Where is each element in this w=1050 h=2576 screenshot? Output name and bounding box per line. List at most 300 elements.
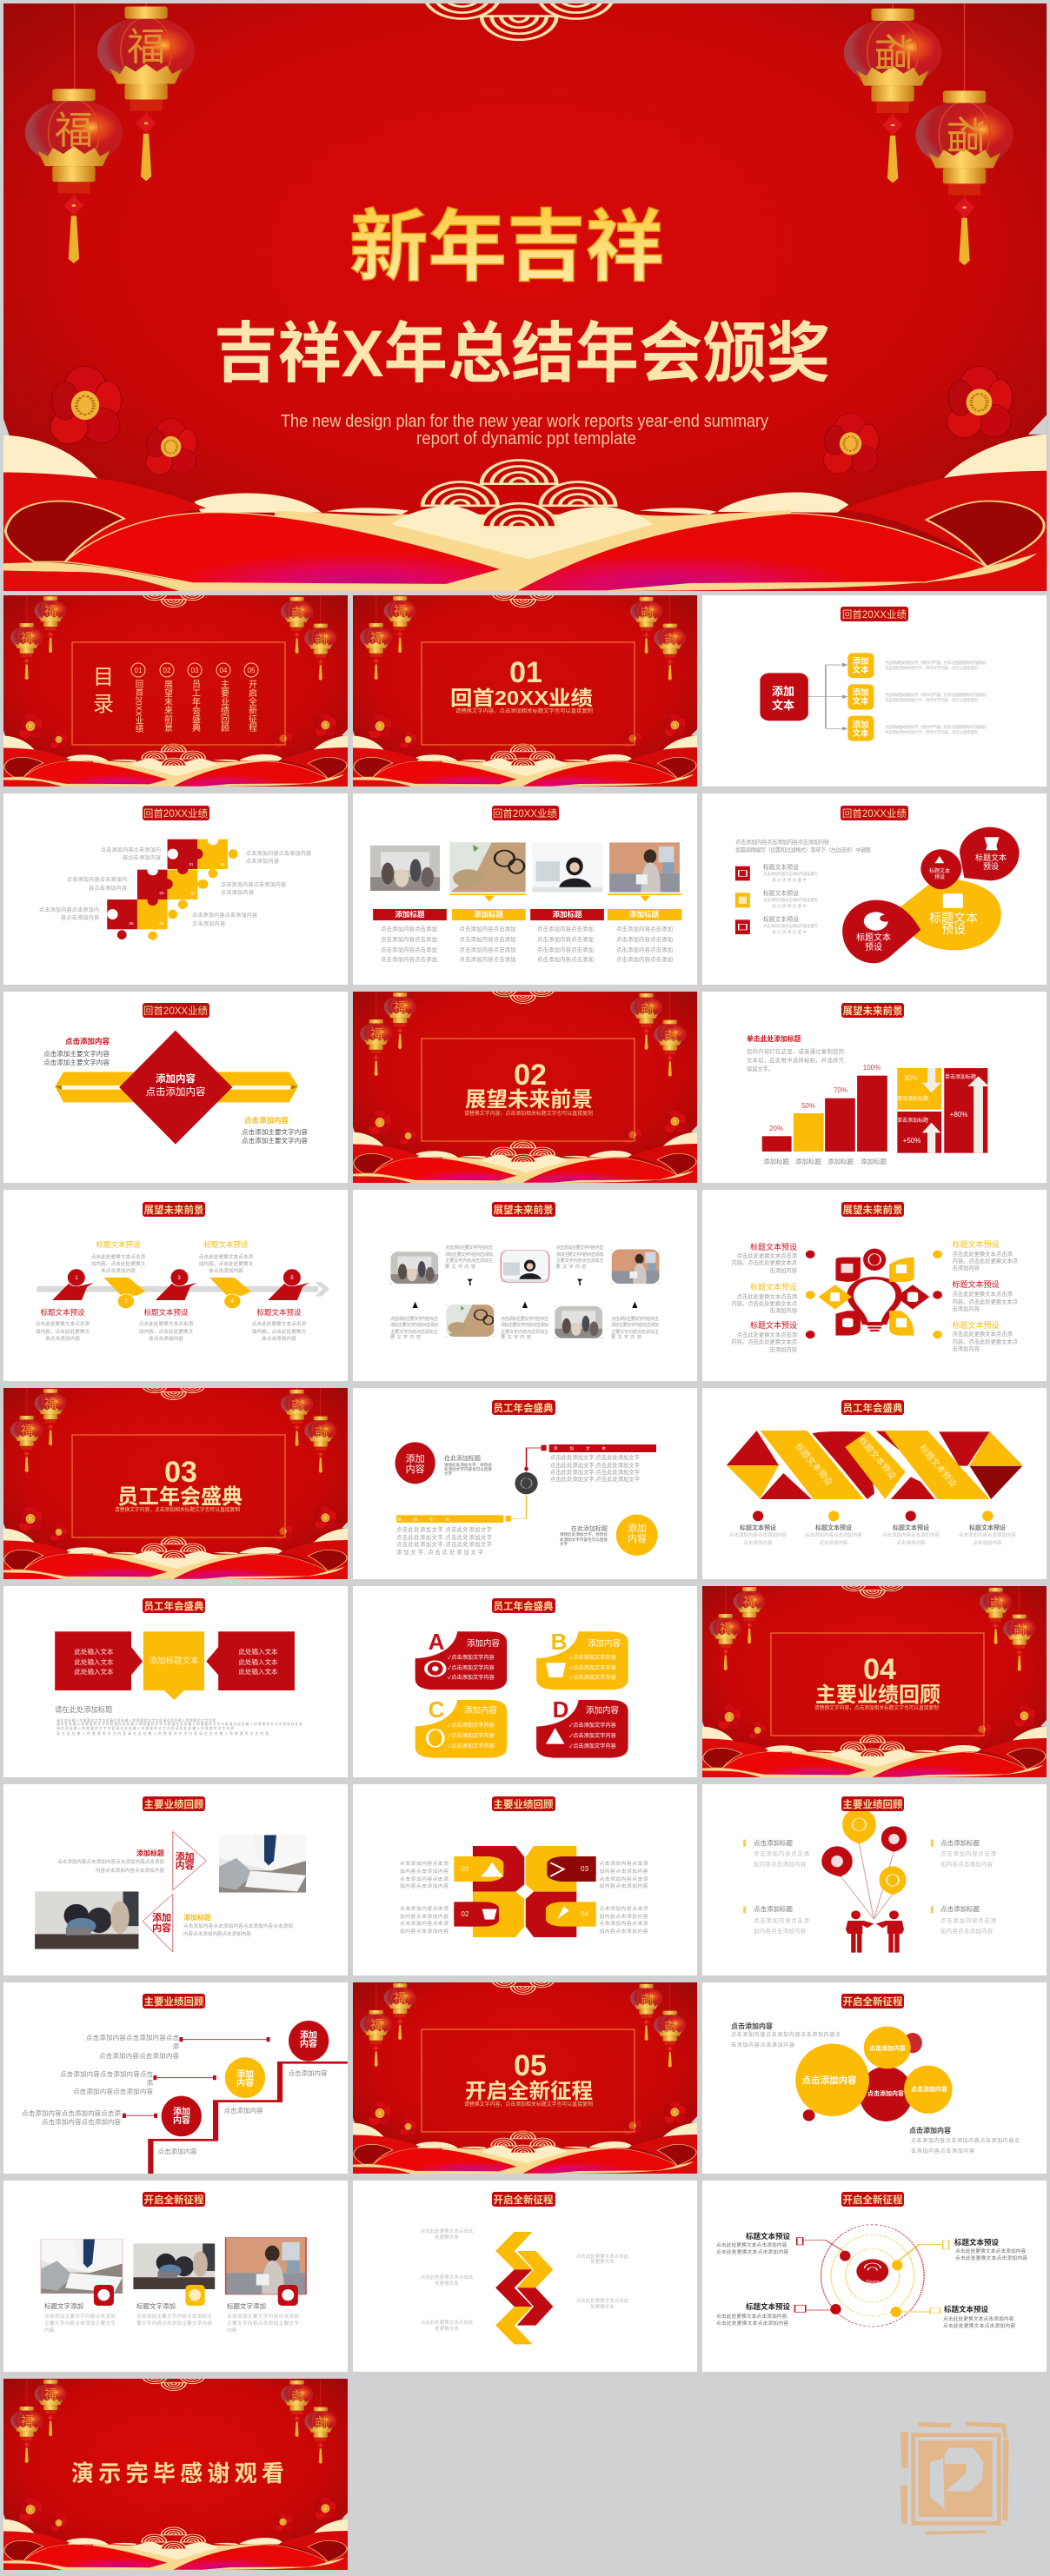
descriptions: 点击添加相关标题文字，修改文字内容，也可以直接复制 (885, 697, 978, 703)
panel: puzzle slide (3, 793, 348, 985)
bar labels: 添加文本 (397, 1517, 450, 1523)
descriptions (885, 660, 987, 735)
process labels (406, 1452, 647, 1544)
step captions: 加内容。点击此处更换文 (91, 1260, 146, 1267)
teardrop labels: 标题文本 (856, 932, 891, 943)
card lists: ✓点击添加文字内容 (569, 1722, 616, 1729)
panel: light bulb slide: 击添加内容 (770, 1306, 798, 1314)
bubble labels: 点击添加内容 (867, 2089, 904, 2097)
captions: 点击添加内容点击添加内容点击添加内容点击添加 (183, 1922, 293, 1929)
panel: light bulb slide: 击添加内容 (953, 1305, 980, 1312)
orbit titles: 标题文本预设 (944, 2305, 989, 2314)
left captions: 加内容点击添加内容 (400, 1928, 449, 1935)
lantern characters (55, 26, 986, 154)
lantern labels: 福 (394, 1000, 406, 1015)
puzzle captions: 点击添加内容 (221, 889, 254, 896)
zigzag captions: 处更换文本 (435, 2280, 459, 2287)
callout right: 点击添加主要文字内容 (242, 1136, 308, 1145)
panel: balloons slide (702, 1784, 1047, 1975)
lantern labels: 福 (662, 2020, 677, 2032)
panel: ABCD cards slide (353, 1586, 697, 1777)
left captions: 点击添加内容点击添 (400, 1860, 449, 1867)
intro text: 如需调用编写（设置和过滤格式）菜单下（左边选项）中调整 (735, 846, 872, 853)
orbit captions: 点击此处更换文本点击添加内容 (955, 2254, 1027, 2261)
body text: 点击此处添加文字,点击此处添加文字 (550, 1453, 640, 1461)
block labels (75, 1647, 278, 1676)
panel: light bulb slide: 点击此处更换文本点击添 (737, 1251, 798, 1259)
panel: teardrop slide: 点击添加内容点击添加内容设置可 (763, 897, 818, 903)
panel: contents slide: 01 (135, 667, 143, 674)
callout left: 点击添加内容 (65, 1037, 110, 1046)
body text (396, 1453, 640, 1556)
captions: 添加标题 (136, 1849, 164, 1857)
balloon captions: 点击添加标题 (940, 1838, 980, 1847)
teardrop labels: 标题文本 (975, 853, 1007, 862)
body text: 添加文字,点击此处添加文字 (396, 1548, 483, 1556)
frame (771, 1633, 984, 1736)
panel: section 01 slide (353, 593, 697, 787)
photo captions: 要文字内容 (445, 1263, 476, 1270)
card lists: ✓点击添加文字内容 (448, 1722, 495, 1729)
photo captions (390, 1244, 660, 1340)
balloon captions (754, 1838, 980, 1913)
panel: contents slide: 主要业绩回顾 (219, 680, 229, 733)
callout right: 点击添加内容 (244, 1116, 289, 1125)
column captions: 点击添加内容点击添加 (381, 925, 437, 933)
bubble captions: 击添加内容点击添加内容 (911, 2148, 974, 2154)
block labels: 此处输入文本 (75, 1647, 114, 1656)
heading pill (492, 2192, 555, 2207)
step numbers: 3 (177, 1276, 181, 1281)
heading pill: 开启全新征程 (843, 1995, 903, 2008)
left captions: 加内容点击添加内容 (400, 1913, 449, 1920)
tab numbers: 02 (462, 1910, 469, 1918)
photo captions: 点击添加主要文字内容点击 (556, 1244, 603, 1251)
puzzle captions: 点击添加内容点击添加内容 (246, 850, 311, 857)
captions: 内容点击添加内容点击添加内容 (183, 1930, 251, 1937)
card lists: ✓点击添加文字内容 (448, 1654, 495, 1661)
panel: teardrop slide: 点击添加内容点击添加内容设置可 (763, 923, 818, 929)
heading pill (492, 1202, 555, 1217)
stair captions: 点击添加内容 (224, 2106, 263, 2115)
heading pill (143, 2192, 205, 2207)
closing title: 演示完毕感谢观看 (71, 2460, 284, 2486)
column captions (381, 925, 673, 963)
process captions (444, 1454, 608, 1547)
heading pill: 员工年会盛典 (494, 1402, 554, 1414)
zigzag captions: 点击此处更换文本点击此 (576, 2297, 629, 2304)
process captions: 请替此处添加文字，修改此 (444, 1462, 492, 1468)
panel: light bulb slide (702, 1190, 1047, 1381)
ribbon captions: 标题文本预设 (740, 1524, 776, 1531)
panel: light bulb slide: 点击此处更换文本点击添 (953, 1250, 1013, 1258)
note text: 请在此处输入你需要的文字内容请在此处输入你需要的文字内容请在此处输入你需要的文字内容请在此处输入你需要的文字内容请在此处 (56, 1722, 302, 1726)
block labels: 此处输入文本 (238, 1647, 278, 1656)
stair captions (158, 2068, 328, 2155)
column captions: 点击添加内容点击添加 (381, 955, 437, 963)
photo captions: 主要文字内容点击添加主 (390, 1328, 439, 1335)
zigzag captions: 点击此处更换文本点击此 (421, 2274, 474, 2281)
left captions: 标题文本预设 (750, 1242, 797, 1251)
panel: balloons slide: 点击添加内容点击添 (754, 1849, 810, 1857)
right captions: 标题文本预设 (953, 1279, 1000, 1289)
cards (415, 1631, 628, 1758)
step numbers: 5 (290, 1276, 294, 1281)
section note: 请替换文字内容，点击添加相关标题文字也可以直接复制 (814, 1704, 939, 1711)
card titles: 标题文字添加 (227, 2301, 266, 2310)
diamond graphic (55, 1031, 298, 1145)
orbit captions: 点击此处更换文本点击添加内容, (716, 2241, 788, 2248)
panel: balloons slide: 加内容点击添加内容 (940, 1927, 994, 1935)
right captions: 加内容点击添加内容 (600, 1928, 648, 1935)
panel: diamond slide (3, 992, 348, 1183)
frame (72, 1435, 285, 1537)
captions: 内容点击添加内容点击添加内容 (96, 1867, 164, 1874)
growth labels: 单击添加标题 (945, 1073, 976, 1080)
panel: process circles slide (353, 1388, 697, 1579)
card letters: C (429, 1696, 445, 1723)
heading pill: 回首20XX业绩 (842, 807, 907, 820)
lantern labels: 福 (289, 606, 304, 618)
frame (422, 1039, 635, 1141)
panel: balloons slide: 加内容点击添加内容 (940, 1860, 994, 1868)
chart intro (747, 1034, 844, 1072)
step captions: 点击此处更换文本点击添 (91, 1253, 146, 1260)
right captions: 标题文本预设 (953, 1320, 1000, 1330)
body text: 点击此处添加文字,点击此处添加文字 (550, 1468, 640, 1476)
photo captions: 主要文字内容点击添加主 (445, 1257, 494, 1264)
panel: contents slide: 回首20XX业绩 (134, 680, 143, 734)
tab numbers: 01 (462, 1865, 469, 1873)
section title: 主要业绩回顾 (815, 1683, 940, 1707)
column captions: 点击添加内容点击添加 (616, 955, 673, 963)
contents list (131, 663, 258, 677)
puzzle numbers: 04 (190, 891, 196, 895)
tree labels: 文本 (772, 699, 794, 712)
card letters: B (551, 1629, 567, 1655)
panel: light bulb slide: 内容。点击此处更换文本点 (731, 1299, 797, 1307)
heading pill (143, 806, 209, 820)
heading pill (143, 1202, 205, 1217)
card titles: 添加内容 (467, 1638, 501, 1649)
panel: teardrop slide: 通过调用设置中 (772, 929, 807, 935)
note text (55, 1705, 302, 1736)
ribbon captions: 标题文本预设 (893, 1524, 929, 1531)
descriptions: 点击添加相关标题文字，修改文字内容，也可以直接复制 (885, 665, 978, 671)
tree labels: 添加 (852, 687, 869, 698)
note text: 请在此处输入你需要的文字内容请在此处输入你需要的文字内容请在此处输入你需要的文字内容 (56, 1726, 234, 1730)
step captions: 点击此处更换文本点击添 (36, 1320, 90, 1327)
panel: rounded photos slide (353, 1190, 697, 1381)
chevron labels: 内容 (176, 1859, 195, 1871)
growth labels (897, 1073, 976, 1145)
descriptions: 点击添加相关标题文字，修改文字内容，也可以直接复制你的内容到此 (885, 692, 987, 698)
panel: zigzag slide (353, 2181, 697, 2372)
lantern labels: 福 (21, 631, 33, 646)
timeline graphic (37, 1269, 329, 1309)
step titles (40, 1240, 302, 1317)
puzzle captions: 点击添加内容点击添加内 (101, 846, 161, 853)
captions (57, 1849, 293, 1937)
source label: Source (866, 2280, 880, 2285)
descriptions: 点击添加相关标题文字，修改文字内容，也可以直接复制 (885, 729, 978, 735)
growth labels: 单击添加标题 (897, 1095, 928, 1102)
stair captions: 点击添加内容 (158, 2147, 197, 2155)
card lists: ✓点击添加文字内容 (569, 1732, 616, 1739)
photo captions: 要文字内容 (501, 1333, 532, 1340)
orbit titles: 标题文本预设 (746, 2232, 790, 2241)
heading pill: 展望未来前景 (843, 1005, 902, 1017)
panel: ribbon slide: 点击添加内容点击添加内容 (882, 1531, 940, 1538)
left captions: 点击添加内容点击添 (400, 1905, 449, 1912)
section note: 请替换文字内容，点击添加相关标题文字也可以直接复制 (115, 1506, 240, 1513)
stair captions: 点击添加内容 (289, 2068, 328, 2077)
panel: stairs slide: 点击添加内容点击添加内容 (42, 2117, 122, 2126)
panel: contents slide: 开启全新征程 (247, 680, 257, 732)
panel: two photos chevron slide (3, 1784, 348, 1975)
panel: contents slide: 员工年会盛典 (189, 680, 200, 733)
blocks (55, 1631, 295, 1700)
chart intro: 保留文字。 (747, 1065, 774, 1072)
column captions: 点击添加内容点击添加 (537, 925, 594, 933)
bar categories: 添加标题 (763, 1157, 789, 1165)
left captions: 加内容点击添加内容 (400, 1882, 449, 1889)
tab numbers (462, 1865, 589, 1918)
panel: teardrop slide (702, 793, 1047, 985)
card captions (44, 2313, 299, 2334)
icon: watermark stamp (900, 2421, 1009, 2535)
heading pill (492, 1400, 555, 1415)
list text: 标题文本预设 (763, 915, 799, 923)
zigzag captions: 点击此处更换文本点击此 (576, 2253, 629, 2260)
bar categories: 添加标题 (861, 1157, 887, 1165)
chevron labels: 内容 (152, 1922, 171, 1934)
ribbon captions (740, 1524, 1006, 1531)
heading pill: 员工年会盛典 (494, 1600, 554, 1612)
panel: balloons slide: 点击添加内容点击添 (940, 1849, 997, 1857)
orbit captions: 点击此处更换文本点击添加内容 (716, 2248, 788, 2255)
note text: 请在此处输入你需要的文字内容请在此处输入你需要的文字内容请在此处输入你需要的文字内容 (56, 1718, 216, 1723)
bar labels: 添加标题 (395, 910, 425, 919)
section number: 05 (514, 2049, 547, 2082)
bar labels: 添加标题 (629, 910, 659, 919)
teardrop labels (856, 853, 1007, 953)
panel: contents slide: 03 (191, 667, 199, 674)
panel: tree diagram slide (702, 595, 1047, 787)
photo captions: 点击添加主要文字内容点击 (390, 1315, 438, 1322)
contents heading: 目 (93, 666, 114, 689)
step titles: 标题文本预设 (256, 1308, 302, 1317)
step captions: 加内容。点击此处更换文 (36, 1328, 90, 1335)
step captions: 加内容。点击此处更换文 (252, 1328, 307, 1335)
panel: light bulb slide: 击添加内容 (770, 1266, 798, 1274)
orbit captions: 点击此处更换文本点击添加内容 (943, 2322, 1015, 2329)
bar values: 100% (863, 1064, 881, 1072)
process captions: 在此添加标题 (571, 1524, 608, 1532)
panel: section 03 slide (3, 1385, 348, 1579)
heading pill: 员工年会盛典 (144, 1600, 204, 1612)
panel: balloons slide: 点击添加内容点击添 (754, 1916, 810, 1924)
photo captions: 要文字内容 (611, 1333, 642, 1340)
puzzle captions: 点击添加内容点击添加内 (39, 906, 99, 913)
lantern labels: 福 (44, 604, 56, 619)
step numbers: 1 (75, 1276, 78, 1281)
panel: ribbon slide: 点击添加内容点击添加内容 (805, 1531, 862, 1538)
column captions: 点击添加内容点击添加 (537, 946, 594, 953)
card titles: 添加内容 (586, 1705, 620, 1716)
bar chart (762, 1068, 989, 1153)
panel: light bulb slide: 内容。点击此处更换文本点 (953, 1338, 1018, 1345)
balloon captions: 点击添加标题 (754, 1838, 793, 1847)
left captions (400, 1860, 449, 1935)
stair circle labels: 内容 (236, 2077, 254, 2088)
zigzag captions: 处更换文本 (590, 2258, 615, 2265)
right captions: 点击添加内容点击添 (600, 1905, 648, 1912)
panel: ribbon slide: 点击添加内容 (743, 1539, 773, 1546)
photos with badges (41, 2238, 306, 2306)
english tagline (281, 412, 768, 448)
card captions: 内容 (227, 2327, 237, 2334)
column captions: 点击添加内容点击添加 (381, 946, 437, 953)
heading pill (841, 1994, 904, 2008)
heading pill: 回首20XX业绩 (842, 608, 907, 621)
puzzle numbers: 06 (159, 921, 164, 926)
step captions: 本点击添加内容 (45, 1335, 80, 1342)
right captions (953, 1239, 1000, 1330)
heading pill (143, 1598, 205, 1613)
panel: balloons slide: 点击添加内容点击添 (940, 1916, 997, 1924)
section number: 02 (514, 1059, 547, 1092)
section title: 开启全新征程 (465, 2080, 593, 2103)
frame (72, 642, 285, 745)
panel: section 05 slide (353, 1980, 697, 2174)
card titles: 添加内容 (464, 1705, 498, 1716)
orbit captions (716, 2241, 1027, 2329)
lantern labels: 福 (662, 633, 677, 645)
step numbers (75, 1276, 294, 1305)
section title: 回首20XX业绩 (450, 687, 593, 709)
bar categories: 添加标题 (827, 1157, 854, 1165)
photos and bars (370, 842, 681, 920)
card letters: A (429, 1629, 445, 1655)
ribbon labels (793, 1435, 960, 1490)
process captions: 处添加文字内容也可以直接 (444, 1466, 492, 1472)
section note: 请替换文字内容，点击添加相关标题文字也可以直接复制 (455, 707, 593, 714)
block labels: 此处输入文本 (238, 1667, 278, 1676)
intro text: 点击添加内容点击添加内容点击添加内容 (735, 838, 830, 846)
panel: ribbon slide: 点击添加内容 (896, 1539, 926, 1546)
card lists (448, 1654, 616, 1749)
body text: 点击此处添加文字,点击此处添加文字 (396, 1540, 492, 1548)
photo captions: 添加主要文字内容点击添加 (501, 1321, 548, 1328)
step numbers: 4 (230, 1299, 234, 1305)
contents heading (93, 666, 114, 716)
puzzle numbers: 03 (159, 891, 164, 895)
column captions: 点击添加内容点击添加 (381, 935, 437, 943)
lantern labels: 福 (289, 2389, 304, 2401)
balloon captions: 点击添加标题 (940, 1904, 980, 1913)
note text: 请在此处输入你需要的文字内容请在此处输入你需要的文字内容请在此处输入你需要的文字内容 (56, 1731, 269, 1736)
stairs graphic (123, 2021, 348, 2174)
card captions: 要文字内容点击添加主要文字内容 (136, 2320, 212, 2327)
card titles: 添加内容 (588, 1638, 621, 1649)
lantern labels: 福 (662, 1029, 677, 1041)
panel: ribbon slide (702, 1388, 1047, 1579)
teardrop labels: 预设 (941, 922, 966, 936)
column captions: 点击添加内容点击添加 (459, 925, 516, 933)
ribbon labels: 标题文本预设 (856, 1435, 899, 1482)
panel: light bulb slide: 击添加内容 (953, 1344, 980, 1352)
heading pill: 主要业绩回顾 (843, 1798, 903, 1810)
card lists: ✓点击添加文字内容 (448, 1743, 495, 1749)
orbit titles (746, 2232, 1000, 2314)
photo captions: 点击添加主要文字内容点击 (611, 1315, 659, 1322)
tree labels: 添加 (772, 685, 794, 698)
orbit captions: 点击此处更换文本点击添加内容, (716, 2313, 788, 2320)
left captions: 加内容点击添加内容 (400, 1868, 449, 1875)
callout left: 点击添加主要文字内容 (43, 1058, 110, 1066)
growth labels: 30% (904, 1074, 918, 1082)
tab numbers: 03 (581, 1865, 589, 1873)
ribbon labels: 标题文本预设 (793, 1441, 835, 1488)
panel: stairs slide (3, 1982, 348, 2174)
panel: light bulb slide: 击添加内容 (953, 1264, 980, 1271)
panel: contents slide: 展望未来前景 (162, 680, 172, 732)
zigzag captions: 点击此处更换文本点击此 (421, 2227, 474, 2234)
bar labels (395, 910, 659, 919)
panel: three blocks slide (3, 1586, 348, 1777)
step captions: 本点击添加内容 (262, 1335, 296, 1342)
card captions: 点击添加主要文字内容点击添加主 (136, 2313, 212, 2320)
step captions: 加内容。点击此处更换文 (199, 1260, 254, 1267)
card captions: 点击添加主要文字内容点击添加 (44, 2313, 116, 2320)
lantern labels (21, 2387, 328, 2429)
orbit captions: 点击此处更换文本点击添加内容, (955, 2247, 1027, 2254)
ribbon graphic (727, 1431, 1022, 1521)
column captions: 点击添加内容点击添加 (616, 946, 673, 953)
lantern labels: 福 (370, 631, 382, 646)
lantern labels: 福 (44, 2387, 56, 2402)
teardrop shapes (735, 827, 1020, 963)
callout left: 点击添加主要文字内容 (43, 1049, 110, 1058)
frame (422, 2029, 635, 2132)
photos and chevrons (35, 1831, 306, 1952)
right captions (600, 1860, 648, 1935)
card lists: ✓点击添加文字内容 (569, 1743, 616, 1749)
orbit titles: 标题文本预设 (954, 2238, 1000, 2247)
teardrop labels: 标题文本 (929, 867, 950, 874)
captions: 点击添加内容点击添加内容点击添加内容点击添加 (57, 1858, 164, 1865)
lantern characters: 福 (127, 26, 165, 69)
lantern labels: 福 (394, 604, 406, 619)
process captions: 处添加文字内容也可以直接 (560, 1537, 608, 1543)
bar labels: 添加文本 (554, 1445, 607, 1451)
column captions: 点击添加内容点击添加 (459, 946, 516, 953)
right captions: 点击添加内容点击添 (600, 1860, 648, 1867)
panel: stairs slide: 点击添加内容点击添加内容点击 (86, 2033, 179, 2042)
lantern labels: 福 (21, 1424, 33, 1438)
puzzle (107, 835, 237, 940)
lantern labels: 福 (743, 1595, 755, 1610)
panel: light bulb slide: 内容。点击此处更换文本点 (953, 1298, 1018, 1305)
heading pill (841, 1400, 904, 1415)
panel: bar chart slide (702, 992, 1047, 1183)
step captions: 点击此处更换文本点击添 (199, 1253, 254, 1260)
growth labels: 单击添加标题 (897, 1117, 928, 1124)
stair circle labels: 内容 (300, 2038, 317, 2049)
heading pill (492, 806, 559, 820)
card lists: ✓点击添加文字内容 (569, 1654, 616, 1661)
